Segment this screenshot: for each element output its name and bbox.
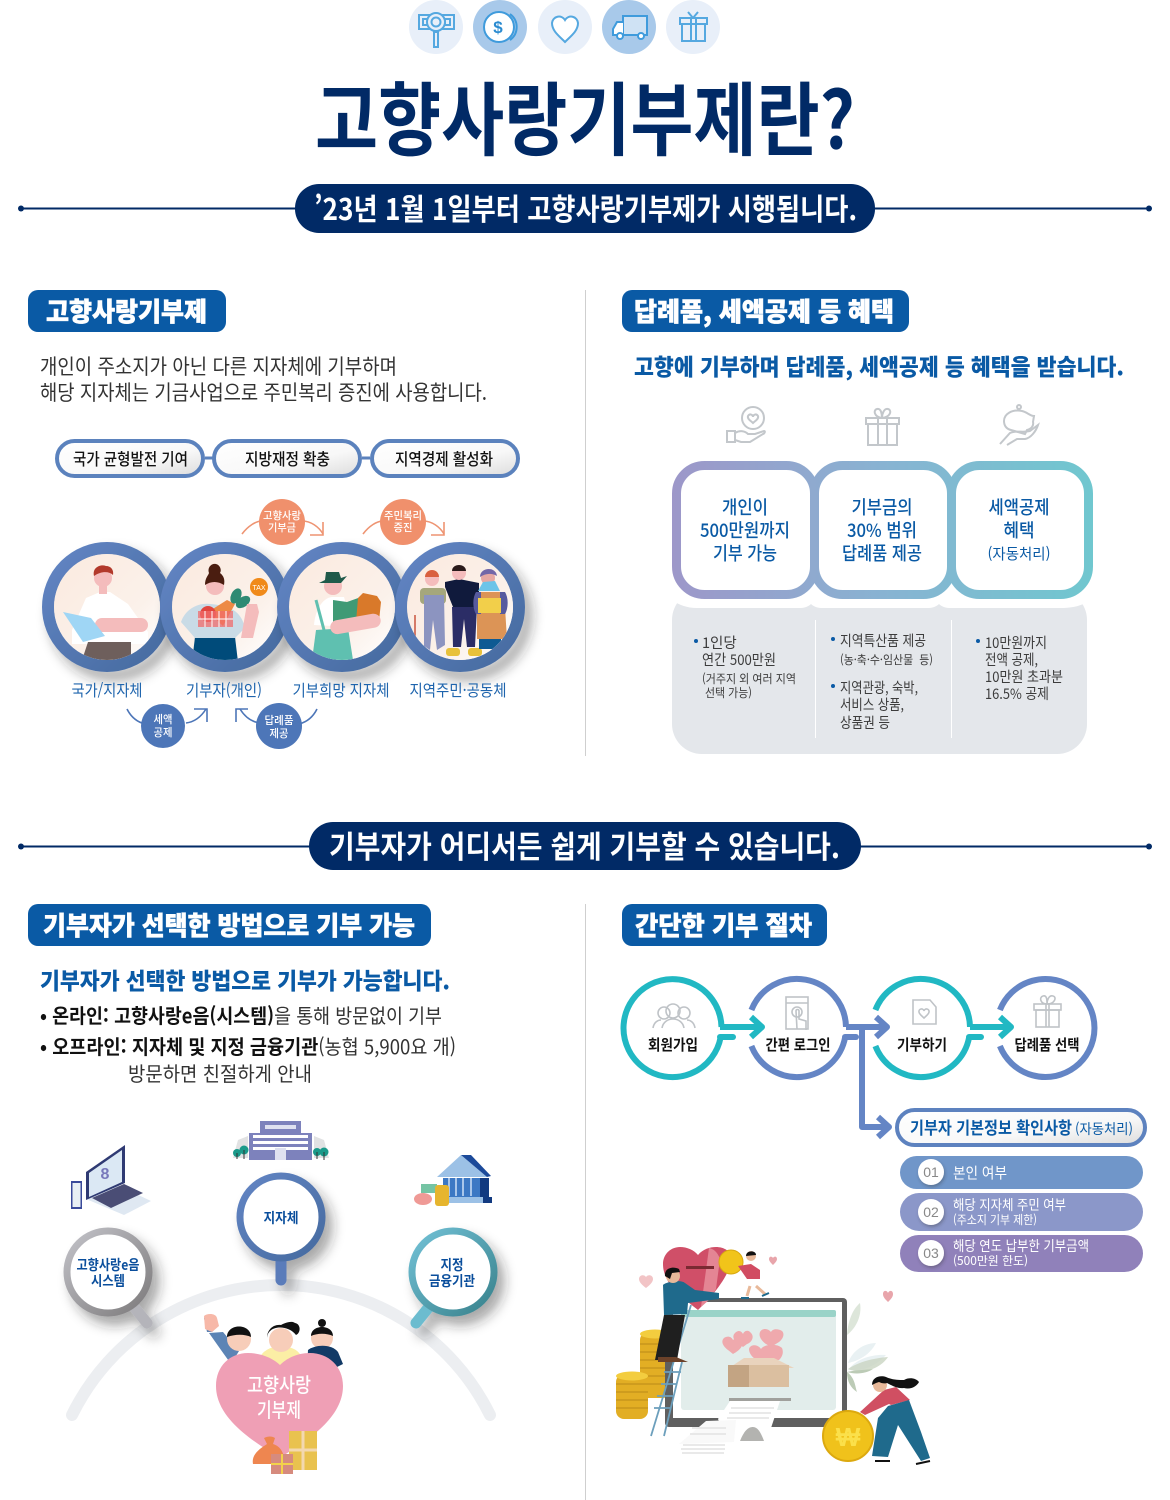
big won coin	[823, 1411, 873, 1461]
icon: hand with piggy bank	[1000, 405, 1038, 445]
details column 2: 서비스 상품,	[840, 694, 904, 715]
illustration: kids with heart and gifts	[204, 1314, 343, 1474]
item 03: (500만원 한도)	[953, 1252, 1028, 1269]
details column 3	[976, 632, 1063, 704]
details column 2: 상품권 등	[840, 712, 890, 733]
pill: 지방재정 확충: 지방재정 확충	[245, 446, 330, 470]
big heart	[663, 1247, 732, 1310]
pin labels: 시스템	[91, 1271, 125, 1291]
pill: 국가 균형발전 기여: 국가 균형발전 기여	[73, 446, 188, 470]
panel: 기부 방법	[28, 904, 494, 1474]
panel: 고향사랑기부제	[28, 290, 519, 749]
branch arrow	[862, 1027, 889, 1137]
circle labels: 국가/지자체	[72, 677, 142, 701]
item 01	[900, 1156, 1143, 1189]
details column 1: 선택 가능)	[705, 684, 752, 701]
step labels: 간편 로그인	[766, 1034, 830, 1055]
icon: gift box	[666, 0, 720, 54]
text block: online and offline: • 온라인: 고향사랑e음(시스템)을 통해 방문없이 기부	[40, 1000, 442, 1029]
circle: 지역주민·공동체 group	[401, 548, 519, 666]
small coin	[719, 1250, 743, 1274]
item 02: 해당 지자체 주민 여부	[953, 1195, 1066, 1215]
details column 3: 10만원 초과분	[985, 666, 1063, 687]
plant leaves	[847, 1303, 888, 1392]
step: 회원가입	[624, 979, 762, 1077]
ladder	[651, 1305, 691, 1436]
heading: 기부자가 선택한 방법으로 기부 가능: 기부자가 선택한 방법으로 기부 가능	[43, 906, 415, 943]
icon: bank with coins	[414, 1155, 492, 1206]
item 02: (주소지 기부 제한)	[953, 1211, 1037, 1228]
badge: 답례품 제공: 제공	[270, 725, 288, 741]
details column 2: 지역관광, 숙박,	[840, 677, 918, 698]
card text: 답례품 제공: 30% 범위	[847, 517, 917, 543]
top icon row	[409, 0, 720, 54]
pin labels: 지정	[440, 1255, 464, 1275]
pill: 지방재정 확충	[214, 441, 360, 476]
card text: 답례품 제공: 답례품 제공	[842, 540, 922, 566]
handwritten heart text: 고향사랑	[247, 1369, 311, 1398]
step: 간편 로그인	[751, 979, 887, 1077]
pill: 지역경제 활성화	[372, 441, 518, 476]
flow arrows upper	[242, 521, 444, 535]
open box with hearts	[722, 1329, 794, 1387]
details column 3: 10만원까지	[985, 632, 1047, 653]
circle labels	[72, 677, 506, 701]
step: 답례품 선택	[1000, 979, 1094, 1077]
item 03: 03	[923, 1245, 939, 1261]
pill: 기부자 기본정보 확인사항	[897, 1110, 1145, 1145]
badge: 주민복리 증진: 주민복리	[384, 508, 422, 523]
card text: 세액공제: (자동처리)	[988, 543, 1050, 564]
pin: 지정 금융기관	[412, 1231, 494, 1323]
heading: 고향사랑기부제: 고향사랑기부제	[46, 292, 207, 329]
badge: 고향사랑 기부금: 고향사랑	[263, 508, 301, 523]
icon: magnifier with banknote	[409, 0, 463, 54]
section banner: 시행 안내: ’23년 1월 1일부터 고향사랑기부제가 시행됩니다.	[314, 185, 857, 229]
step: 기부하기	[875, 979, 1011, 1077]
text block: online and offline	[40, 1000, 456, 1087]
card text: 세액공제: 세액공제	[988, 494, 1050, 520]
text block: description: 개인이 주소지가 아닌 다른 지자체에 기부하며	[40, 351, 397, 381]
icon: laptop and phone	[71, 1145, 151, 1215]
circle labels: 기부희망 지자체	[292, 677, 390, 701]
illustration: donation monitor	[616, 1247, 930, 1464]
badge: 고향사랑 기부금	[259, 499, 305, 545]
circle labels: 지역주민·공동체	[410, 677, 506, 701]
item 03: 해당 연도 납부한 기부금액	[953, 1236, 1089, 1256]
icon: laptop and phone: 8	[101, 1166, 110, 1183]
badge: 세액 공제: 공제	[154, 724, 172, 740]
heading: 답례품, 세액공제 등 혜택: 답례품, 세액공제 등 혜택	[634, 292, 894, 329]
circle: 국가/지자체 person	[48, 548, 166, 666]
icon: city hall building	[233, 1121, 329, 1160]
icon: dollar coin	[473, 0, 527, 54]
text block: description: 해당 지자체는 기금사업으로 주민복리 증진에 사용합니다.	[40, 377, 487, 407]
pill: 기부자 기본정보 확인사항: (자동처리)	[1075, 1119, 1133, 1139]
pill: 지역경제 활성화: 지역경제 활성화	[395, 446, 493, 470]
card text: 개인 기부 한도	[700, 494, 790, 566]
pin labels: 금융기관	[429, 1271, 475, 1291]
badge: 세액 공제: 세액	[154, 711, 172, 727]
pin: 지자체	[240, 1176, 322, 1280]
handwritten heart text: 기부제	[257, 1394, 301, 1423]
man on ladder	[655, 1268, 719, 1362]
card text: 개인 기부 한도: 500만원까지	[700, 517, 790, 543]
badge: 답례품 제공: 답례품	[264, 712, 294, 728]
circle: 기부자(개인) woman with basket: TAX	[252, 585, 266, 592]
coin stacks	[616, 1330, 671, 1419]
woman pushing coin	[860, 1376, 930, 1464]
icon: delivery truck	[602, 0, 656, 54]
goal pills	[57, 441, 518, 476]
arc	[72, 1285, 490, 1415]
pin labels: 고향사랑e음	[76, 1255, 140, 1275]
card text: 답례품 제공: 기부금의	[852, 494, 912, 520]
step labels: 회원가입	[648, 1034, 698, 1055]
icon: hand with heart	[727, 407, 765, 442]
card text: 세액공제: 혜택	[1004, 517, 1034, 543]
circle: 기부자(개인) woman with basket	[166, 548, 284, 666]
step labels	[648, 1034, 1080, 1055]
panel: 기부 절차	[616, 904, 1145, 1464]
icon: dollar coin: $	[493, 18, 503, 37]
icon: touch screen	[786, 997, 808, 1030]
title: 고향사랑기부제란?	[315, 57, 855, 173]
pill: 국가 균형발전 기여	[57, 441, 203, 476]
badge: 고향사랑 기부금: 기부금	[268, 520, 296, 535]
text block: online and offline: 방문하면 친절하게 안내	[128, 1058, 312, 1087]
details column 2: (농·축·수·임산물 등)	[840, 651, 933, 668]
pill: 기부자 기본정보 확인사항: 기부자 기본정보 확인사항	[910, 1114, 1072, 1139]
card text: 세액공제	[988, 494, 1050, 564]
flow arrows lower	[127, 709, 317, 724]
text block: description	[40, 351, 487, 407]
icon: people	[653, 1004, 695, 1028]
circle: 기부희망 지자체 farmer	[283, 548, 401, 666]
details column 3: 16.5% 공제	[985, 683, 1049, 704]
pin labels	[76, 1208, 475, 1291]
circle labels: 기부자(개인)	[186, 677, 262, 701]
subheading: 고향에 기부하며 답례품, 세액공제 등 혜택을 받습니다.	[634, 348, 1124, 382]
badge: 답례품 제공	[256, 703, 302, 749]
details column 2	[831, 630, 933, 733]
small hearts	[639, 1257, 893, 1302]
child pushing coin	[738, 1251, 769, 1298]
details column 1: (거주지 외 여러 지역	[702, 670, 796, 687]
step labels: 기부하기	[897, 1034, 947, 1055]
icon: gift	[1034, 996, 1061, 1027]
details column 1: 연간 500만원	[702, 649, 776, 670]
heading: 간단한 기부 절차: 간단한 기부 절차	[635, 906, 812, 943]
card text: 답례품 제공	[842, 494, 922, 566]
handwritten heart text	[247, 1369, 311, 1423]
text block: online and offline: • 오프라인: 지자체 및 지정 금융기관(농협 5,900요 개)	[40, 1031, 456, 1060]
badge: 세액 공제	[141, 704, 185, 748]
monitor	[665, 1298, 847, 1427]
details column 1	[694, 632, 796, 701]
badge: 주민복리 증진: 증진	[394, 520, 412, 535]
section banner: 어디서든 기부	[18, 822, 1152, 870]
card text: 개인 기부 한도: 기부 가능	[713, 540, 777, 566]
item 01: 본인 여부	[953, 1162, 1007, 1183]
pin: 고향사랑e음 시스템	[67, 1231, 149, 1323]
boxes with gradient border	[672, 466, 1088, 754]
subheading: 기부자가 선택한 방법으로 기부가 가능합니다.	[40, 962, 450, 996]
item 02	[900, 1193, 1143, 1231]
icon: gift box	[866, 409, 899, 445]
badge: 주민복리 증진	[380, 499, 426, 545]
item 01: 01	[923, 1164, 939, 1180]
section banner: 어디서든 기부: 기부자가 어디서든 쉽게 기부할 수 있습니다.	[329, 822, 840, 867]
details column 2: 지역특산품 제공	[840, 630, 926, 651]
item 02: 02	[923, 1204, 939, 1220]
pin labels: 지자체	[264, 1208, 298, 1228]
big won coin: ₩	[836, 1422, 861, 1452]
receipt	[679, 1398, 791, 1453]
icon: heart	[538, 0, 592, 54]
card text: 개인 기부 한도: 개인이	[722, 494, 768, 520]
details column 1: 1인당	[702, 632, 737, 653]
section banner: 시행 안내	[18, 184, 1152, 233]
panel: 혜택	[622, 290, 1124, 754]
icon: heart document	[913, 1000, 936, 1024]
item 03	[900, 1235, 1143, 1272]
step labels: 답례품 선택	[1014, 1034, 1080, 1055]
details column 3: 전액 공제,	[985, 649, 1038, 670]
